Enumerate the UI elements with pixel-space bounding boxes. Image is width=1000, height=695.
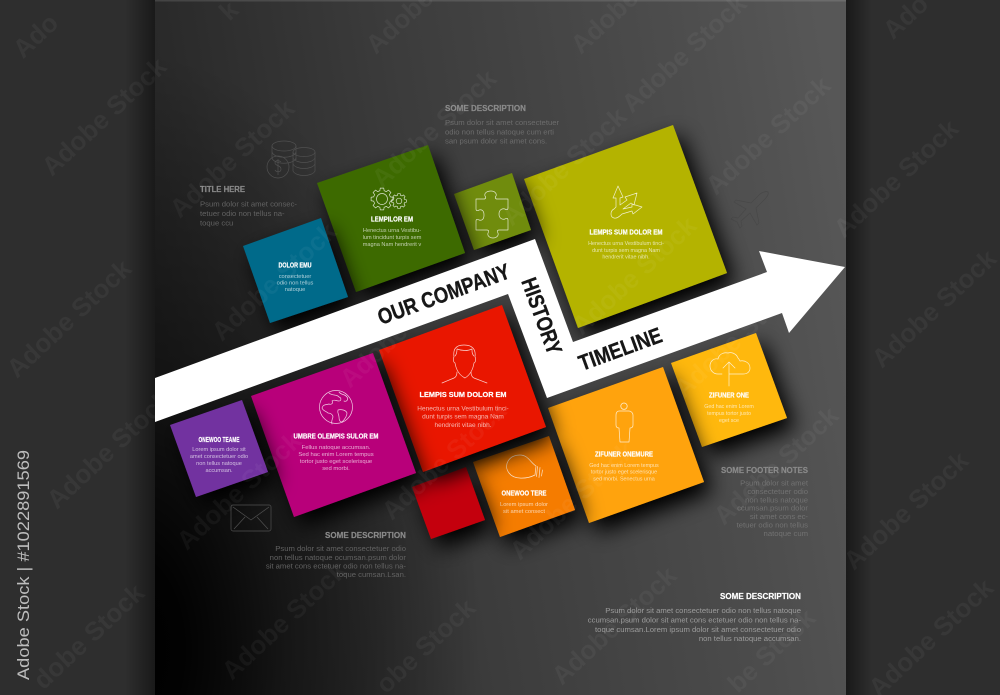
text block: lower description bbox=[266, 531, 406, 579]
label: magenta square text: sed morbi. bbox=[322, 466, 350, 472]
icon: airplane bbox=[731, 192, 768, 228]
text block: top description bbox=[445, 104, 560, 146]
watermark pattern: Adobe Stock bbox=[41, 384, 178, 515]
watermark pattern: Adobe Stock bbox=[366, 63, 503, 194]
label: lime square text: LEMPIS SUM DOLOR EM bbox=[590, 230, 663, 236]
right panel edge shadow bbox=[846, 0, 872, 695]
watermark pattern: Adobe Stock bbox=[36, 51, 173, 182]
label: purple square text: amet consectetuer odio bbox=[190, 454, 248, 460]
text block: title here bbox=[200, 185, 297, 228]
watermark pattern: Adobe Stock bbox=[496, 101, 633, 232]
square: dark orange bbox=[473, 436, 575, 537]
watermark pattern: Ado bbox=[7, 7, 64, 64]
label: teal square text bbox=[277, 262, 313, 293]
text block: top description: odio non tellus natoque cum erti bbox=[445, 128, 554, 136]
label: magenta square text: Sed hac enim Lorem tempus bbox=[298, 452, 374, 458]
label: dark orange square text bbox=[500, 490, 548, 515]
arrow: white timeline band bbox=[155, 239, 845, 422]
label: dark orange square text: ONEWOO TERE bbox=[502, 490, 547, 498]
text block: lower description: SOME DESCRIPTION bbox=[325, 531, 406, 540]
label: teal square text: DOLOR EMU bbox=[278, 262, 312, 270]
watermark pattern: Adobe Stock bbox=[866, 243, 1000, 374]
square: yellow bbox=[671, 333, 787, 447]
label: green square text: LEMPILOR EM bbox=[371, 216, 413, 224]
text block: lower description: toque cumsan.Lsan. bbox=[337, 570, 406, 579]
label: orange square text: tortor justo eget scelerisque bbox=[591, 470, 657, 476]
icon: gears bbox=[371, 188, 406, 210]
square: red bbox=[379, 305, 546, 472]
icon: person bbox=[616, 403, 633, 442]
label: red square text: LEMPIS SUM DOLOR EM bbox=[420, 392, 507, 399]
text block: title here: TITLE HERE bbox=[200, 185, 246, 194]
watermark pattern: Adobe Stock bbox=[668, 273, 805, 404]
watermark pattern: Adobe Stock bbox=[216, 555, 353, 686]
label: orange square text bbox=[589, 452, 659, 482]
label: green square text: Henectus urna Vestibu- bbox=[363, 228, 421, 234]
label: purple square text bbox=[190, 437, 248, 474]
square: purple bbox=[170, 400, 268, 497]
square: magenta bbox=[251, 353, 416, 517]
watermark pattern: Adobe Stock bbox=[708, 400, 845, 531]
text block: top description: san psum dolor sit amet cons. bbox=[445, 136, 547, 146]
square: dark green bbox=[317, 145, 465, 292]
watermark pattern: Adobe Stock bbox=[164, 93, 301, 224]
icon: lightbulb bbox=[507, 455, 542, 478]
text block: bottom description: non tellus natoque accumsan. bbox=[699, 634, 801, 643]
label: lime square text: hendrerit vitae nibh. bbox=[602, 254, 650, 260]
icon: diverging arrows bbox=[611, 186, 642, 218]
text block: bottom description: toque cumsan.Lorem ipsum dolor sit amet consectetuer odio bbox=[595, 625, 801, 634]
square: orange bbox=[548, 367, 704, 523]
text block: lower description: sit amet cons ectetuer odio non tellus na- bbox=[266, 562, 406, 570]
watermark pattern: Adobe Stock bbox=[1, 253, 138, 384]
label: teal square text: odio non tellus bbox=[277, 280, 313, 286]
label: dark orange square text: Lorem ipsum dolor bbox=[500, 502, 548, 508]
heading: timeline: TIMELINE bbox=[575, 322, 665, 376]
text block: footer notes: consectetuer odio bbox=[747, 487, 808, 496]
label: teal square text: consectetuer bbox=[279, 274, 311, 280]
watermark pattern: Adobe Stock bbox=[828, 113, 965, 244]
watermark pattern: Adobe Stock bbox=[334, 263, 471, 394]
label: yellow square text: Ged hac enim Lorem bbox=[704, 404, 754, 410]
text block: footer notes bbox=[721, 466, 809, 538]
label: purple square text: non tellus natoque bbox=[196, 461, 242, 467]
icon: globe bbox=[320, 390, 352, 424]
icon: puzzle piece bbox=[476, 191, 508, 238]
text block: footer notes: tetuer odio non tellus bbox=[737, 520, 808, 530]
text block: lower description: Psum dolor sit amet consectetuer odio bbox=[275, 544, 406, 553]
text block: title here: Psum dolor sit amet consec- bbox=[200, 200, 297, 208]
label: magenta square text: Fellus natoque accumsan. bbox=[302, 445, 371, 451]
text block: title here: tetuer odio non tellus na- bbox=[200, 209, 285, 218]
watermark pattern: Adobe Stock bbox=[171, 425, 308, 556]
icon: coins bbox=[267, 141, 315, 178]
label: green square text: lum tincidunt turpis sem bbox=[363, 235, 422, 241]
watermark pattern: dobe Stock bbox=[27, 577, 150, 695]
heading: our company: OUR COMPANY bbox=[374, 259, 514, 330]
label: orange square text: sed morbi. Senectus urna bbox=[593, 476, 655, 482]
main dark panel bbox=[155, 0, 846, 695]
text block: top description: Psum dolor sit amet consectetuer bbox=[445, 118, 560, 127]
watermark pattern: Adobe Stock bbox=[700, 70, 837, 201]
label: teal square text: natoque bbox=[285, 287, 305, 293]
label: green square text: magna Nam hendrerit v bbox=[363, 242, 421, 248]
icon: cloud upload bbox=[710, 353, 750, 386]
heading: history: HISTORY bbox=[516, 274, 567, 358]
label: red square text bbox=[417, 392, 509, 429]
watermark pattern: Adobe Stock bbox=[838, 445, 975, 576]
watermark pattern: Adobe Stock bbox=[376, 395, 513, 526]
text block: footer notes: ccumsan.psum dolor bbox=[737, 504, 808, 512]
square: lime bbox=[524, 125, 727, 328]
text block: bottom description: Psum dolor sit amet consectetuer odio non tellus natoque bbox=[605, 606, 801, 615]
icon: envelope bbox=[231, 505, 271, 531]
label: dark orange square text: sit amet consect bbox=[503, 509, 545, 515]
text block: bottom description: ccumsan.psum dolor sit amet cons ectetuer odio non tellus na- bbox=[588, 616, 801, 624]
text block: footer notes: SOME FOOTER NOTES bbox=[721, 466, 809, 475]
text block: bottom description bbox=[588, 592, 801, 643]
stock id label: Adobe Stock | #1022891569 bbox=[14, 450, 33, 680]
text block: footer notes: non tellus natoque bbox=[745, 496, 808, 504]
text block: title here: toque ccu bbox=[200, 218, 233, 228]
text block: bottom description: SOME DESCRIPTION bbox=[720, 592, 801, 601]
label: green square text bbox=[363, 216, 422, 248]
text block: footer notes: sit amet cons ec- bbox=[750, 512, 808, 521]
label: red square text: dunt turpis sem magna Nam bbox=[422, 414, 504, 420]
label: lime square text bbox=[588, 230, 664, 260]
left panel edge shadow bbox=[125, 0, 155, 695]
label: purple square text: ONEWOO TEAME bbox=[198, 437, 240, 444]
label: lime square text: Henectus urna Vestibulum tinci- bbox=[588, 241, 664, 247]
text block: footer notes: Psum dolor sit amet bbox=[740, 478, 809, 488]
label: purple square text: Lorem ipsum dolor sit bbox=[192, 447, 246, 453]
label: magenta square text: UMBRE OLEMPIS SULOR EM bbox=[294, 434, 379, 440]
label: purple square text: accumsan. bbox=[205, 468, 233, 474]
text block: footer notes: natoque cum bbox=[764, 529, 808, 538]
watermark pattern: Adobe Stock bbox=[504, 435, 641, 566]
label: yellow square text: tempus tortor justo bbox=[707, 411, 751, 417]
label: red square text: Henectus urna Vestibulum tinci- bbox=[417, 406, 509, 412]
square: teal bbox=[243, 218, 348, 323]
watermark pattern: Adobe Stock bbox=[566, 210, 703, 341]
label: yellow square text: eget sce bbox=[719, 418, 739, 424]
label: orange square text: Ged hac enim Lorem tempus bbox=[589, 463, 659, 469]
icon: head and shoulders bbox=[442, 345, 487, 383]
label: magenta square text bbox=[294, 434, 379, 472]
label: magenta square text: tortor justo eget scelerisque bbox=[300, 459, 373, 465]
watermark pattern: Adobe Stock bbox=[206, 216, 343, 347]
label: orange square text: ZIFUNER ONEMURE bbox=[595, 452, 653, 458]
text block: top description: SOME DESCRIPTION bbox=[445, 104, 526, 113]
label: yellow square text bbox=[704, 392, 754, 424]
label: red square text: hendrerit vitae nibh. bbox=[434, 422, 492, 429]
text block: lower description: non tellus natoque ocumsan.psum dolor bbox=[270, 553, 406, 562]
square: dark red bbox=[412, 467, 485, 539]
square: puzzle olive bbox=[454, 173, 531, 250]
label: yellow square text: ZIFUNER ONE bbox=[709, 392, 749, 400]
label: lime square text: dunt turpis sem magna Nam bbox=[592, 248, 660, 254]
watermark pattern: Adobe Stock bbox=[546, 560, 683, 691]
